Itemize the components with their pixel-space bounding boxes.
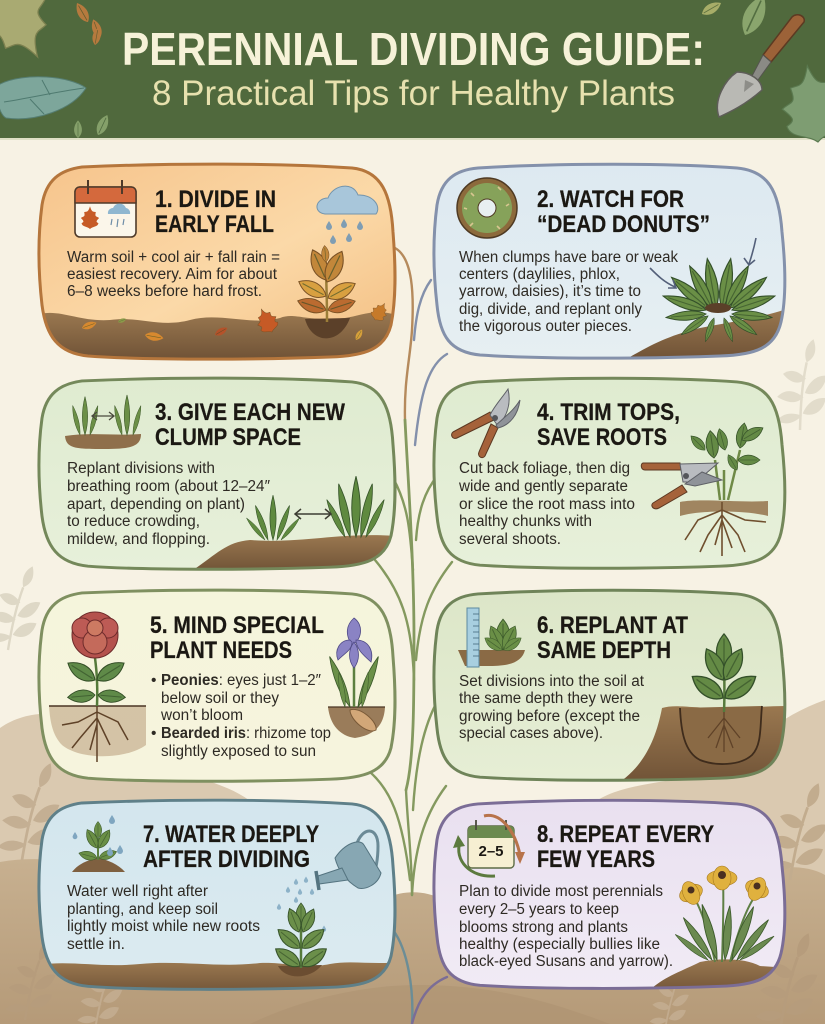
body text: healthy chunks with — [459, 513, 592, 530]
vine connecting stems — [370, 248, 452, 1024]
body text: mildew, and flopping. — [67, 531, 210, 548]
decorative branches — [0, 338, 825, 1024]
bulleted text: Peonies: eyes just 1–2″ — [161, 672, 321, 689]
body text — [67, 460, 271, 548]
icon: watering can — [316, 831, 381, 890]
icon: black-eyed susans — [673, 866, 776, 962]
heading — [150, 612, 324, 664]
body text: several shoots. — [459, 531, 561, 548]
header banner — [0, 0, 825, 146]
body text: apart, depending on plant) — [67, 496, 245, 513]
title: PERENNIAL DIVIDING GUIDE: — [122, 23, 705, 75]
heading: AFTER DIVIDING — [143, 846, 310, 873]
icon: top right leaves — [700, 0, 772, 39]
icon: watered seedling — [72, 815, 125, 872]
bulleted text — [151, 672, 331, 760]
icon: watered plant — [272, 903, 330, 971]
heading — [537, 399, 680, 451]
subtitle: 8 Practical Tips for Healthy Plants — [152, 74, 675, 113]
body text: special cases above). — [459, 725, 603, 742]
heading — [537, 186, 710, 238]
arrow: spacing — [295, 509, 331, 519]
body text — [67, 883, 260, 953]
body text: wide and gently separate — [458, 478, 628, 495]
icon: plant with roots — [680, 422, 768, 556]
soil — [196, 535, 390, 568]
panel: 7 water deeply after dividing — [38, 800, 396, 995]
heading: EARLY FALL — [155, 211, 274, 238]
body text: breathing room (about 12–24″ — [67, 478, 271, 495]
heading: 3. GIVE EACH NEW — [155, 399, 345, 426]
body text: Set divisions into the soil at — [459, 673, 645, 690]
body text: planting, and keep soil — [67, 901, 218, 918]
heading — [143, 821, 319, 873]
panel: 3 give each new clump space — [39, 378, 396, 572]
heading: 6. REPLANT AT — [537, 612, 688, 639]
heading: 4. TRIM TOPS, — [537, 399, 680, 426]
icon: small orange leaves — [73, 1, 104, 46]
heading: 8. REPEAT EVERY — [537, 821, 714, 848]
body text: Replant divisions with — [67, 460, 215, 477]
body text: to reduce crowding, — [67, 513, 200, 530]
body text: yarrow, daisies), it’s time to — [459, 283, 641, 300]
body text: or slice the root mass into — [459, 496, 635, 513]
soil with planting hole — [624, 706, 784, 779]
icon: replanted plant — [688, 634, 760, 752]
body text — [459, 249, 678, 335]
body text: lightly moist while new roots — [67, 918, 260, 935]
panel: 8 repeat every few years — [434, 800, 790, 995]
body text: black-eyed Susans and yarrow). — [459, 953, 673, 970]
body text: settle in. — [67, 936, 125, 953]
body text: the vigorous outer pieces. — [459, 318, 632, 335]
heading: CLUMP SPACE — [155, 424, 301, 451]
icon: trowel — [717, 15, 804, 117]
body text: the same depth they were — [459, 690, 633, 707]
bulleted text: slightly exposed to sun — [161, 743, 316, 760]
heading: SAVE ROOTS — [537, 424, 667, 451]
heading: 2. WATCH FOR — [537, 186, 684, 213]
heading: PLANT NEEDS — [150, 637, 292, 664]
icon: autumn plant — [252, 245, 391, 336]
icon: small green leaves — [74, 113, 112, 138]
panel: 4 trim tops save roots — [434, 378, 785, 568]
body text: Plan to divide most perennials — [459, 883, 663, 900]
icon: pruners — [452, 389, 520, 458]
body text: centers (daylilies, phlox, — [459, 266, 620, 283]
heading: SAME DEPTH — [537, 637, 671, 664]
body text: dig, divide, and replant only — [459, 301, 642, 318]
body text: When clumps have bare or weak — [459, 249, 678, 266]
soil mound — [630, 310, 782, 357]
bulleted text: below soil or they — [161, 690, 279, 707]
soil strip — [52, 962, 387, 988]
soil mound — [654, 959, 774, 987]
heading: 1. DIVIDE IN — [155, 186, 276, 213]
body text: healthy (especially bullies like — [459, 936, 660, 953]
heading: “DEAD DONUTS” — [537, 211, 710, 238]
bulleted text: won’t bloom — [160, 707, 243, 724]
panel: 2 watch for dead donuts — [434, 164, 790, 360]
soil strip — [40, 312, 396, 360]
icon: iris — [326, 618, 385, 738]
heading — [155, 186, 276, 238]
bulleted text: Bearded iris: rhizome top — [161, 725, 331, 742]
body text: easiest recovery. Aim for about — [67, 266, 278, 283]
panel: 5 mind special plant needs — [39, 590, 395, 781]
heading — [537, 821, 714, 873]
body text: 6–8 weeks before hard frost. — [67, 283, 262, 300]
body text: blooms strong and plants — [459, 919, 628, 936]
heading — [155, 399, 345, 451]
arrows pointing to centre — [650, 238, 756, 288]
water drops — [277, 876, 326, 958]
body text: Cut back foliage, then dig — [459, 460, 630, 477]
icon: peony — [49, 612, 146, 762]
icon: oak leaf top left — [0, 0, 69, 75]
icon: calendar — [75, 180, 136, 237]
body text — [459, 883, 673, 970]
body text: Warm soil + cool air + fall rain = — [67, 249, 280, 266]
heading — [537, 612, 688, 664]
icon: right oak leaf — [777, 61, 825, 146]
heading: 5. MIND SPECIAL — [150, 612, 324, 639]
body text — [458, 460, 635, 548]
body text — [67, 249, 280, 300]
body text: every 2–5 years to keep — [459, 901, 619, 918]
icon: pruners cutting — [641, 463, 722, 509]
icon: spaced grass clumps — [245, 476, 387, 541]
body text: Water well right after — [67, 883, 208, 900]
bulleted text: • — [151, 672, 156, 689]
fallen leaves — [81, 317, 364, 342]
body text — [459, 673, 645, 742]
icon: two clumps — [65, 395, 143, 449]
panel: 6 replant at same depth — [434, 590, 790, 785]
icon: repeat calendar: 2–5 — [478, 843, 504, 860]
icon: teal leaf — [0, 77, 86, 119]
heading: FEW YEARS — [537, 846, 655, 873]
body text: growing before (except the — [459, 708, 640, 725]
heading: 7. WATER DEEPLY — [143, 821, 319, 848]
icon: donut — [457, 178, 517, 238]
icon: repeat calendar — [453, 815, 525, 876]
icon: ruler and seedling — [458, 608, 525, 667]
icon: donut plant — [662, 258, 776, 342]
panel: 1 divide in early fall — [39, 164, 396, 360]
bulleted text: • — [151, 725, 156, 742]
icon: rain cloud — [317, 186, 378, 244]
